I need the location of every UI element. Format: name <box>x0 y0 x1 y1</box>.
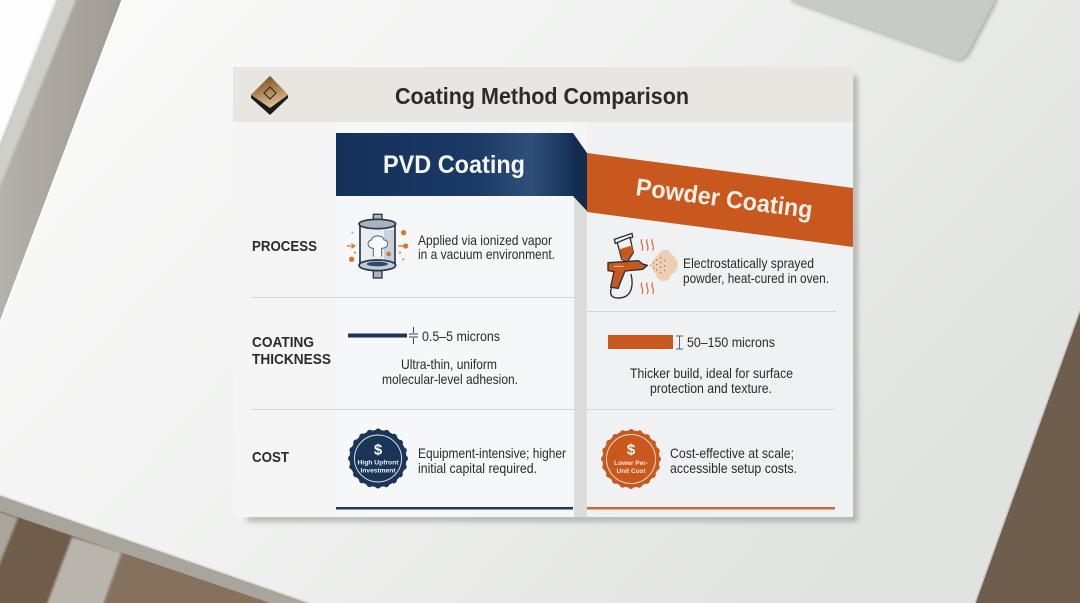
text: PVD cost: initial capital required. <box>418 460 537 476</box>
icon: powder thick layer bar <box>608 335 683 349</box>
text: powder process <box>683 255 829 286</box>
badge: lower per-unit cost: Unit Cost <box>616 468 646 475</box>
text: powder thickness description: Thicker build, ideal for surface <box>630 365 793 381</box>
row label: cost: COST <box>252 449 289 466</box>
icon: spray gun <box>608 233 678 298</box>
text: PVD cost <box>418 445 566 476</box>
title: Coating Method Comparison <box>395 83 689 109</box>
badge: lower per-unit cost: Lower Per- <box>614 460 648 467</box>
text: PVD process: in a vacuum environment. <box>418 246 555 262</box>
column header: PVD Coating: PVD Coating <box>383 151 525 179</box>
text: PVD cost: Equipment-intensive; higher <box>418 445 566 461</box>
panel: comparison card <box>233 67 853 517</box>
text: PVD process: Applied via ionized vapor <box>418 232 552 248</box>
row label: process: PROCESS <box>252 238 317 255</box>
row label: coating thickness: THICKNESS <box>252 351 331 368</box>
text: PVD process <box>418 232 555 262</box>
badge: high upfront investment: $ <box>374 442 383 458</box>
row dividers and column footers <box>251 298 836 510</box>
row label: coating thickness <box>252 334 331 368</box>
row label: coating thickness: COATING <box>252 334 314 351</box>
icon: diamond logo <box>251 76 288 115</box>
text: powder process: Electrostatically sprayed <box>683 255 814 271</box>
header bar <box>233 67 853 122</box>
text: powder thickness description: protection and texture. <box>650 380 772 396</box>
column header: Powder Coating <box>587 153 853 247</box>
badge: high upfront investment <box>350 430 406 487</box>
badge: lower per-unit cost: $ <box>627 442 636 458</box>
card shadow <box>247 76 857 521</box>
text: PVD thickness description: molecular-level adhesion. <box>382 371 518 387</box>
text: PVD thickness description: Ultra-thin, uniform <box>401 356 497 372</box>
text: PVD thickness value: 0.5–5 microns <box>422 328 500 344</box>
text: powder thickness value: 50–150 microns <box>687 334 775 350</box>
badge: high upfront investment: High Upfront <box>358 460 399 466</box>
badge: high upfront investment: Investment <box>360 468 396 474</box>
text: PVD thickness description <box>382 356 518 387</box>
column header: Powder Coating: Powder Coating <box>634 174 814 224</box>
text: powder cost: accessible setup costs. <box>670 460 797 476</box>
column header: PVD Coating <box>336 133 587 211</box>
badge: lower per-unit cost <box>602 430 660 488</box>
text: powder cost: Cost-effective at scale; <box>670 445 794 461</box>
icon: vacuum chamber <box>347 214 408 278</box>
text: powder thickness description <box>630 365 793 396</box>
text: powder process: powder, heat-cured in oven. <box>683 270 829 286</box>
icon: PVD thin layer bar <box>348 327 418 344</box>
laptop corner <box>790 0 997 61</box>
text: powder cost <box>670 445 797 476</box>
